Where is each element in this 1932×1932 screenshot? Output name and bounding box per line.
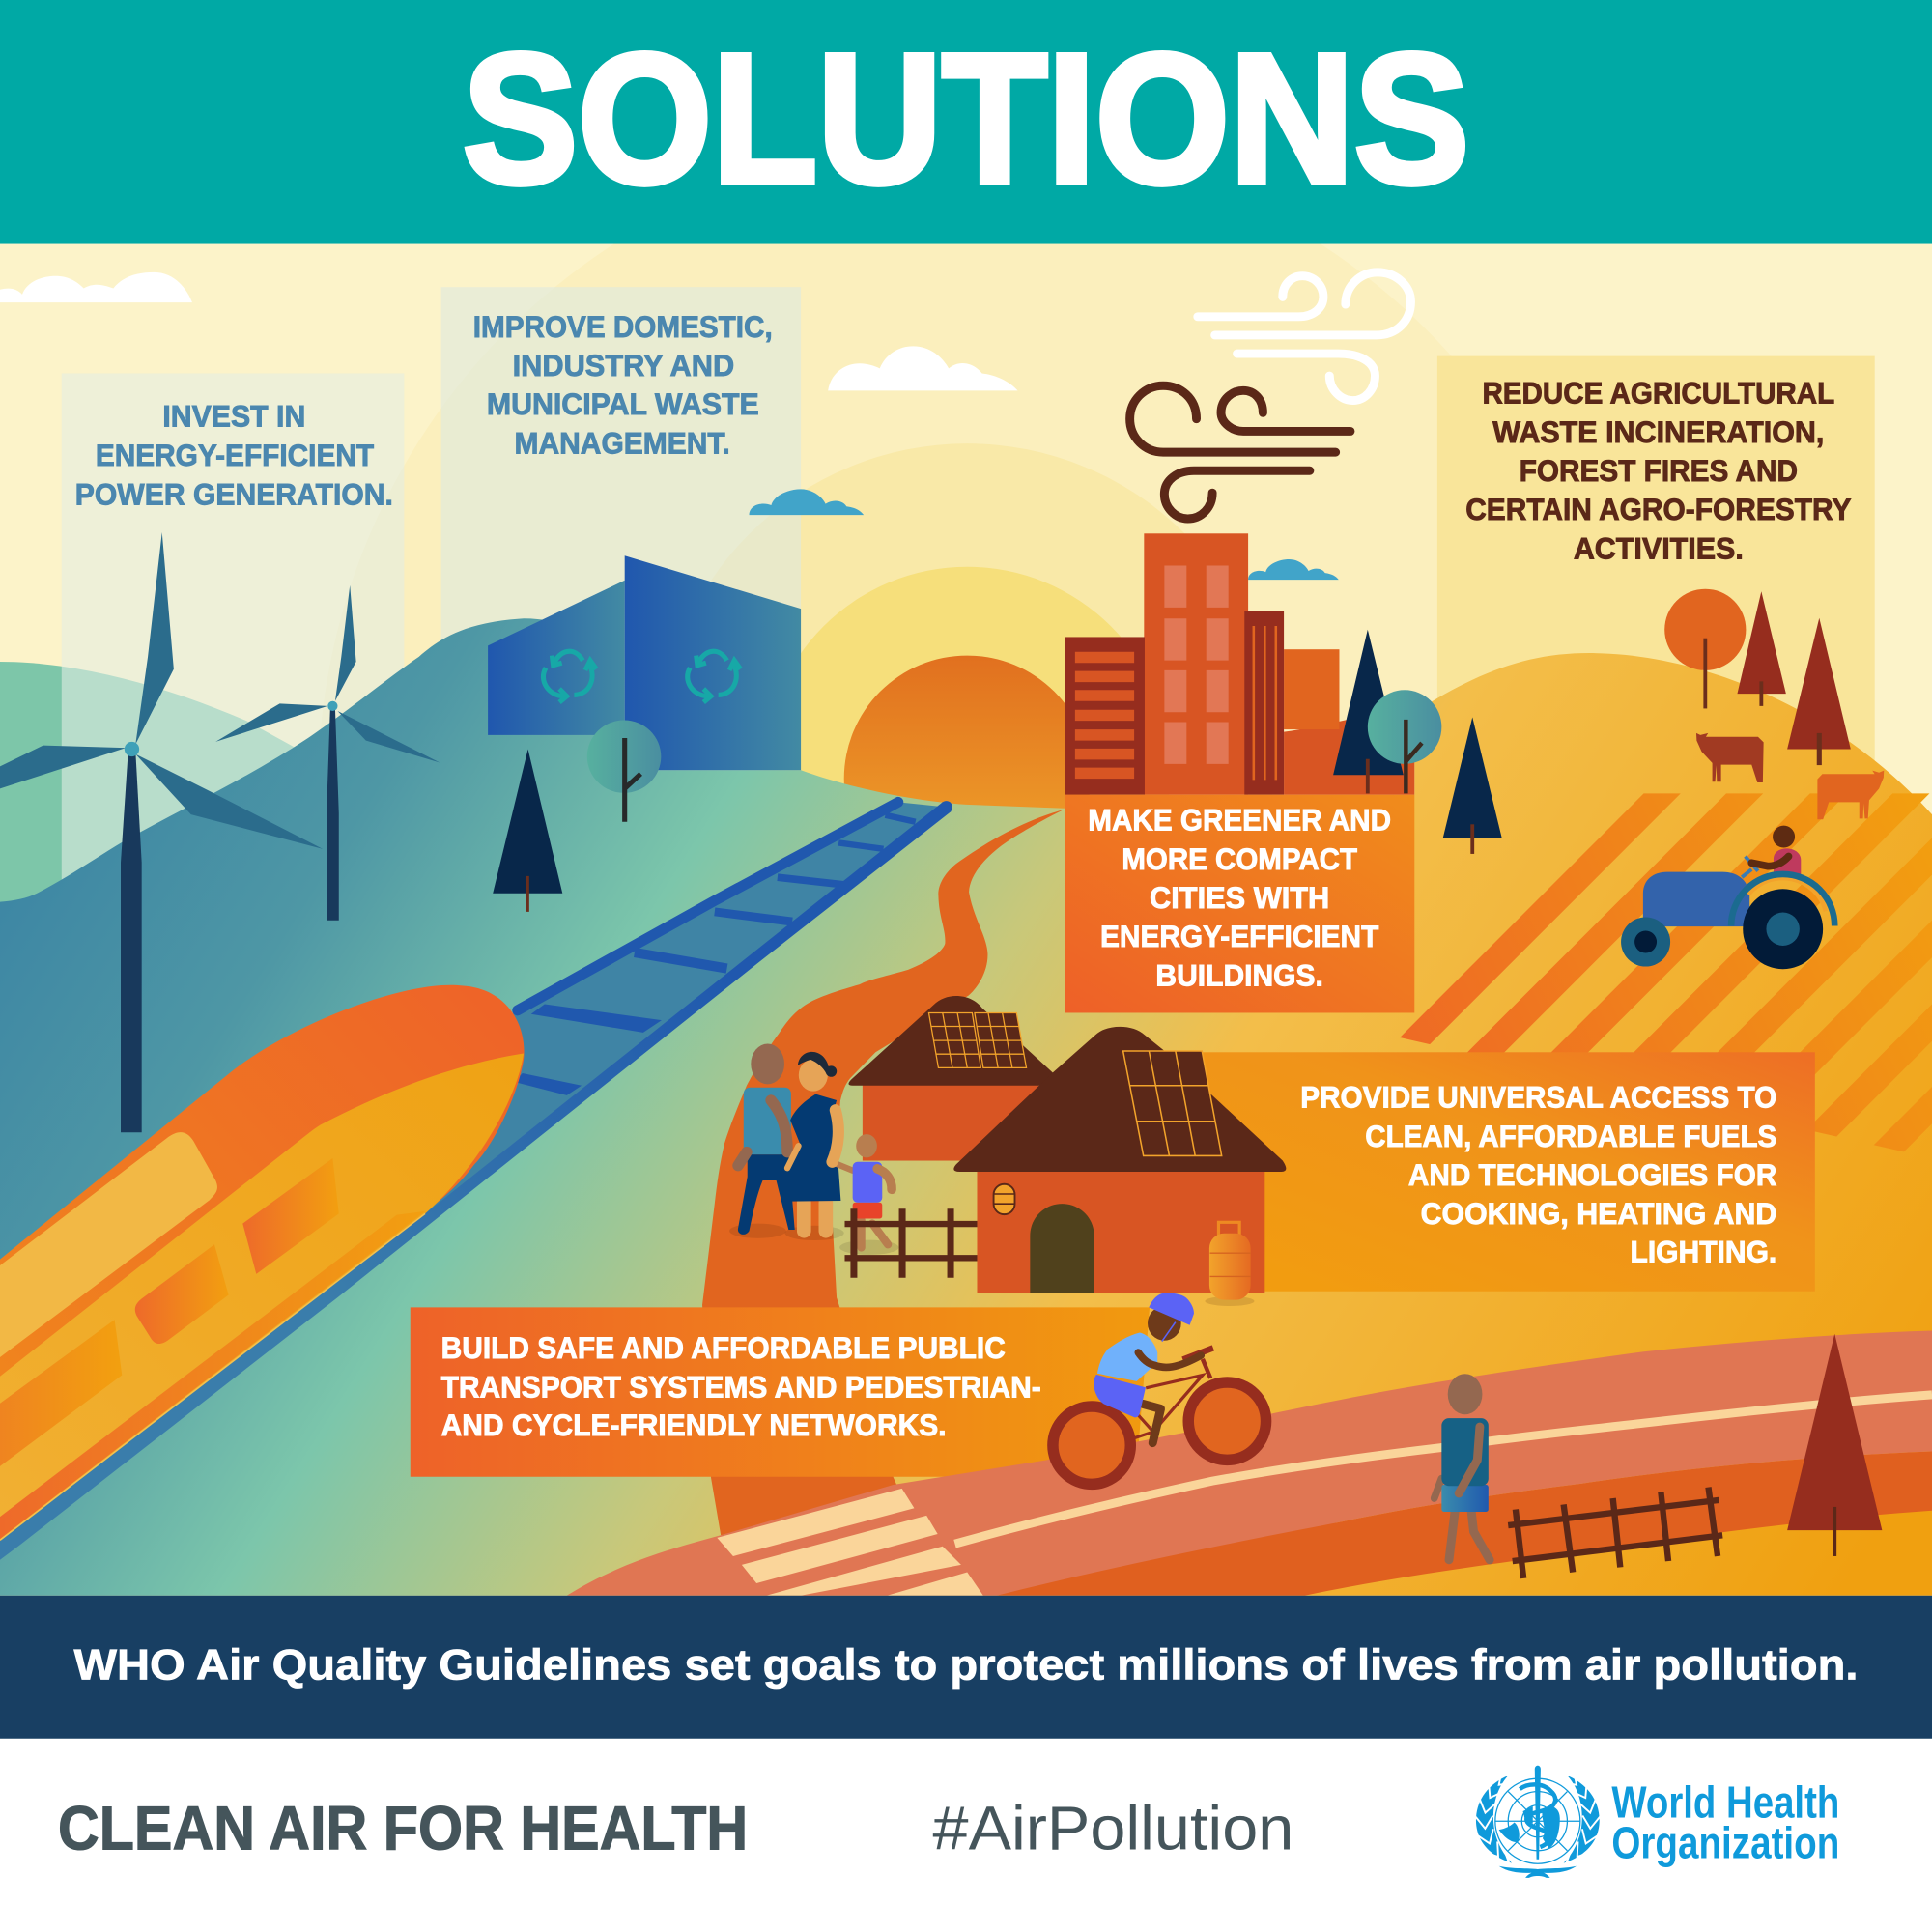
panel text: public transport: AND CYCLE-FRIENDLY NETWORKS. xyxy=(441,1407,947,1442)
icon: recycling left xyxy=(543,651,596,702)
panel text: public transport: TRANSPORT SYSTEMS AND PEDESTRIAN- xyxy=(441,1369,1041,1404)
fence by road xyxy=(1508,1488,1722,1578)
snake xyxy=(1520,1784,1555,1847)
tractor rear wheel xyxy=(1743,889,1823,969)
panel text: clean fuels: LIGHTING. xyxy=(1631,1235,1776,1269)
tower buildings xyxy=(1065,533,1414,795)
horizontal road xyxy=(567,1331,1932,1596)
family shadows xyxy=(729,1224,898,1255)
train window 1 xyxy=(242,1158,339,1274)
round tree by tower xyxy=(1368,690,1441,793)
child xyxy=(853,1134,892,1247)
big wind turbine xyxy=(0,532,323,1132)
railway track xyxy=(0,801,952,1560)
walker xyxy=(1435,1374,1490,1560)
panel text: greener compact cities xyxy=(1088,803,1391,992)
panel: public transport xyxy=(411,1307,1150,1477)
window xyxy=(994,1184,1015,1214)
man xyxy=(738,1043,795,1235)
winding orange path xyxy=(702,810,1064,1535)
farm trees xyxy=(1664,589,1851,765)
crosswalk xyxy=(717,1489,983,1596)
blue cloud by tower xyxy=(1248,559,1339,580)
solar panel main xyxy=(1123,1051,1222,1155)
panel text: improve waste management xyxy=(473,309,773,460)
pine tree by road xyxy=(1787,1334,1882,1556)
cow orange xyxy=(1817,771,1884,819)
statement text: WHO Air Quality Guidelines set goals to protect millions of lives from air pollution. xyxy=(74,1642,1858,1690)
train lower stripe xyxy=(0,1211,425,1539)
hashtag: #AirPollution xyxy=(933,1794,1293,1863)
icon: brown smoke xyxy=(1130,385,1350,519)
right laurel xyxy=(1560,1770,1600,1874)
scene sky background xyxy=(0,139,1932,1600)
WHO wordmark: World Health xyxy=(1611,1776,1839,1827)
bottom statement band xyxy=(0,1596,1932,1739)
icon: recycling right xyxy=(688,651,741,702)
globe grid xyxy=(1495,1778,1580,1863)
road centre line xyxy=(955,1395,1932,1544)
panel: agricultural waste xyxy=(1437,356,1875,763)
family xyxy=(729,1043,898,1255)
panel: greener cities xyxy=(1065,795,1414,1012)
panel: energy-efficient power generation xyxy=(62,373,404,916)
panel text: greener compact cities: MORE COMPACT xyxy=(1122,841,1357,876)
back house xyxy=(848,996,1055,1161)
recycling building xyxy=(488,555,801,770)
cyclist xyxy=(1053,1293,1266,1484)
panel text: reduce agricultural waste: WASTE INCINERATION, xyxy=(1492,414,1824,449)
continents xyxy=(1499,1806,1560,1848)
panel text: greener compact cities: CITIES WITH xyxy=(1150,880,1329,915)
round tree by building xyxy=(587,721,661,822)
cow brown xyxy=(1696,733,1764,782)
panel text: greener compact cities: ENERGY-EFFICIENT xyxy=(1100,919,1379,953)
fence by family xyxy=(844,1208,977,1278)
sun xyxy=(844,656,1091,902)
panel text: invest in power generation xyxy=(75,398,393,511)
panel text: greener compact cities: BUILDINGS. xyxy=(1155,957,1323,992)
white cloud left xyxy=(0,272,192,302)
field stripes xyxy=(1400,793,1932,1151)
panel: universal clean fuels xyxy=(1181,1052,1815,1292)
bicycle xyxy=(1053,1348,1266,1484)
panel text: clean fuels: PROVIDE UNIVERSAL ACCESS TO xyxy=(1300,1080,1776,1115)
tractor fenders xyxy=(1748,878,1826,911)
ribbon xyxy=(1499,1866,1577,1878)
panel text: invest in power generation: INVEST IN xyxy=(162,398,305,433)
door xyxy=(1030,1204,1094,1293)
panel text: reduce agricultural waste: REDUCE AGRICULTURAL xyxy=(1482,376,1834,411)
solar panels back xyxy=(928,1012,1026,1067)
tractor xyxy=(1621,826,1834,969)
panel text: reduce agricultural waste: CERTAIN AGRO-FORESTRY xyxy=(1465,492,1851,526)
header band xyxy=(0,0,1932,244)
panel text: invest in power generation: ENERGY-EFFICIENT xyxy=(96,438,375,472)
panel text: clean fuels: CLEAN, AFFORDABLE FUELS xyxy=(1365,1119,1776,1153)
panel text: reduce agricultural waste xyxy=(1465,376,1851,565)
WHO wordmark: Organization xyxy=(1611,1817,1839,1867)
rider xyxy=(1094,1293,1201,1443)
high-speed train xyxy=(0,985,525,1540)
panel text: reduce agricultural waste: ACTIVITIES. xyxy=(1574,530,1744,565)
left laurel xyxy=(1476,1770,1516,1874)
staff xyxy=(1535,1766,1541,1860)
white cloud centre xyxy=(828,346,1018,390)
ground and hills xyxy=(0,618,1932,1596)
panel text: reduce agricultural waste: FOREST FIRES AND xyxy=(1520,453,1798,488)
panel text: clean fuels: AND TECHNOLOGIES FOR xyxy=(1408,1157,1776,1192)
left green hill xyxy=(0,662,370,936)
train window 2 xyxy=(135,1244,229,1344)
panel text: improve waste management: MANAGEMENT. xyxy=(515,425,730,460)
campaign name: CLEAN AIR FOR HEALTH xyxy=(58,1794,748,1863)
pine tree by tower xyxy=(1333,630,1404,793)
woman xyxy=(787,1052,853,1231)
WHO wordmark xyxy=(1611,1776,1839,1867)
panel text: greener compact cities: MAKE GREENER AND xyxy=(1088,803,1391,838)
small wind turbine xyxy=(215,585,440,921)
pine tree right of tower xyxy=(1443,717,1502,854)
driver xyxy=(1742,826,1801,877)
WHO emblem xyxy=(1476,1766,1600,1878)
title: SOLUTIONS xyxy=(463,15,1469,222)
panel text: clean fuels: COOKING, HEATING AND xyxy=(1421,1196,1776,1231)
train window 3 xyxy=(0,1320,122,1466)
panel text: public transport: BUILD SAFE AND AFFORDABLE PUBLIC xyxy=(441,1330,1006,1365)
panel text: improve waste management: MUNICIPAL WASTE xyxy=(487,386,759,421)
panel text: invest in power generation: POWER GENERATION. xyxy=(75,476,393,511)
panel text: improve waste management: IMPROVE DOMESTIC, xyxy=(473,309,773,344)
panel text: clean fuels xyxy=(1300,1080,1776,1269)
tractor body xyxy=(1643,872,1749,926)
main house xyxy=(953,1027,1286,1293)
gas cylinder xyxy=(1205,1222,1254,1306)
train windscreen xyxy=(0,1132,217,1357)
panel text: public transport xyxy=(441,1330,1041,1442)
panel text: improve waste management: INDUSTRY AND xyxy=(513,348,734,383)
blue cloud by building xyxy=(750,489,864,515)
tractor front wheel xyxy=(1621,917,1670,967)
panel: waste management xyxy=(441,287,801,780)
pine tree on green hill xyxy=(493,750,562,912)
WHO logo xyxy=(1476,1766,1839,1878)
icon: white wind xyxy=(1198,272,1410,401)
